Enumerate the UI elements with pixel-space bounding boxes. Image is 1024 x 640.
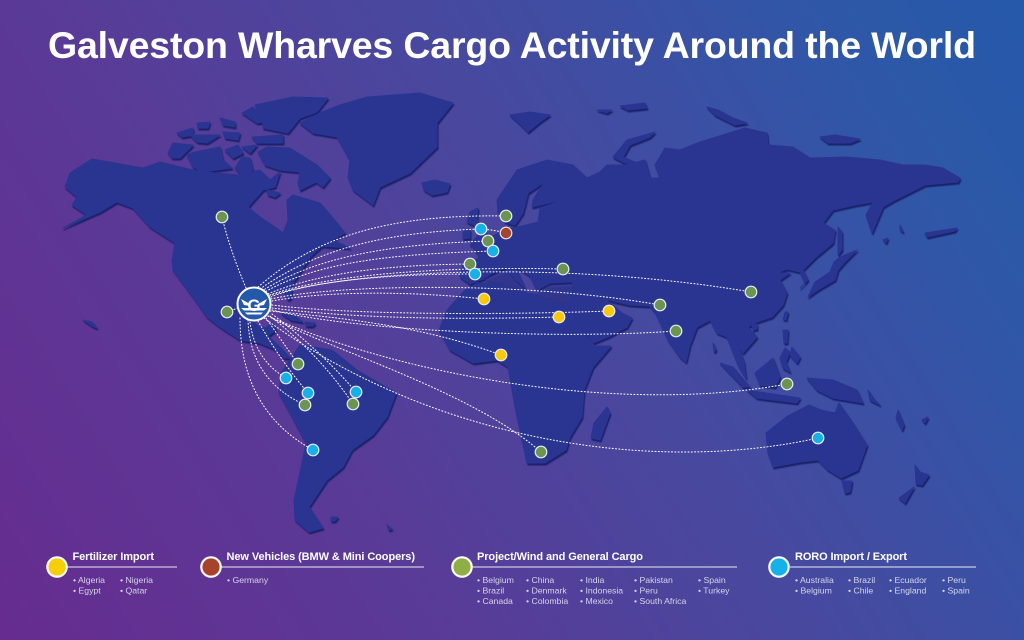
map: Arctic Canada <box>168 97 330 197</box>
shipping routes <box>222 216 818 452</box>
legend: project/wind and general cargo: • Spain <box>698 575 726 585</box>
title: Galveston Wharves Cargo Activity Around the World <box>48 24 976 66</box>
legend: fertilizer import <box>47 551 177 596</box>
map: Madagascar <box>591 407 610 440</box>
legend: RORO import / export: • Belgium <box>795 586 832 596</box>
map: Tasmania, New Zealand, South Atlantic islands <box>331 465 929 530</box>
markers: project/wind and general cargo <box>216 210 793 458</box>
legend: project/wind and general cargo: • Colombia <box>526 596 568 606</box>
legend: project/wind and general cargo: • Peru <box>634 586 658 596</box>
map: Iceland and Hawaii <box>83 180 450 328</box>
map: Africa <box>439 283 611 463</box>
legend: RORO import / export: • Peru <box>942 575 966 585</box>
legend: project/wind and general cargo: • India <box>580 575 604 585</box>
map: Scandinavia <box>497 160 587 225</box>
legend: fertilizer import: • Nigeria <box>120 575 153 585</box>
map: Eurasia <box>460 128 960 378</box>
legend: new vehicles: • Germany <box>227 575 269 585</box>
legend: RORO import / export: • England <box>889 586 927 596</box>
legend: RORO import / export: • Brazil <box>848 575 875 585</box>
legend: RORO import / export: • Chile <box>848 586 873 596</box>
icon: Galveston Wharves logo hub: G <box>247 296 261 315</box>
markers: fertilizer import <box>478 293 615 361</box>
legend: new vehicles: New Vehicles (BMW & Mini Coopers) <box>226 551 415 563</box>
legend: RORO import / export: • Ecuador <box>889 575 927 585</box>
map: Mediterranean tint <box>483 270 573 303</box>
legend: new vehicles <box>201 551 424 585</box>
map: North America <box>63 159 350 358</box>
legend: RORO import / export: RORO Import / Export <box>795 551 907 563</box>
legend: project/wind and general cargo: • Denmark <box>526 586 567 596</box>
map: Greenland <box>300 93 453 205</box>
marker: new vehicles <box>500 227 512 239</box>
legend: fertilizer import: • Algeria <box>73 575 105 585</box>
map: Australia <box>766 403 867 478</box>
legend: project/wind and general cargo <box>452 551 737 606</box>
world map <box>63 93 960 532</box>
map: Japan and Pacific Asia <box>752 225 957 363</box>
legend: project/wind and general cargo: • Indonesia <box>580 586 623 596</box>
map: Southeast Asia and Oceania islands <box>713 343 928 430</box>
legend: project/wind and general cargo: • China <box>526 575 554 585</box>
legend: fertilizer import: Fertilizer Import <box>72 551 154 563</box>
icon: Galveston Wharves logo hub <box>238 288 270 320</box>
legend: RORO import / export <box>769 551 976 596</box>
legend: project/wind and general cargo: • Brazil <box>477 586 504 596</box>
legend: fertilizer import: • Qatar <box>120 586 147 596</box>
markers: RORO import / export <box>280 223 824 456</box>
legend: fertilizer import: • Egypt <box>73 586 101 596</box>
map: Caribbean islands <box>281 313 315 326</box>
legend: RORO import / export: • Spain <box>942 586 970 596</box>
legend: project/wind and general cargo: Project/Wind and General Cargo <box>477 551 643 563</box>
legend: project/wind and general cargo: • Belgium <box>477 575 514 585</box>
legend: project/wind and general cargo: • Canada <box>477 596 513 606</box>
legend: project/wind and general cargo: • Mexico <box>580 596 613 606</box>
legend: RORO import / export: • Australia <box>795 575 834 585</box>
map: British Isles <box>463 208 488 245</box>
legend: project/wind and general cargo: • Turkey <box>698 586 730 596</box>
legend: project/wind and general cargo: • South Africa <box>634 596 686 606</box>
legend: project/wind and general cargo: • Pakistan <box>634 575 673 585</box>
map: South America <box>279 345 396 532</box>
map: Arctic Eurasia islands <box>510 103 860 163</box>
